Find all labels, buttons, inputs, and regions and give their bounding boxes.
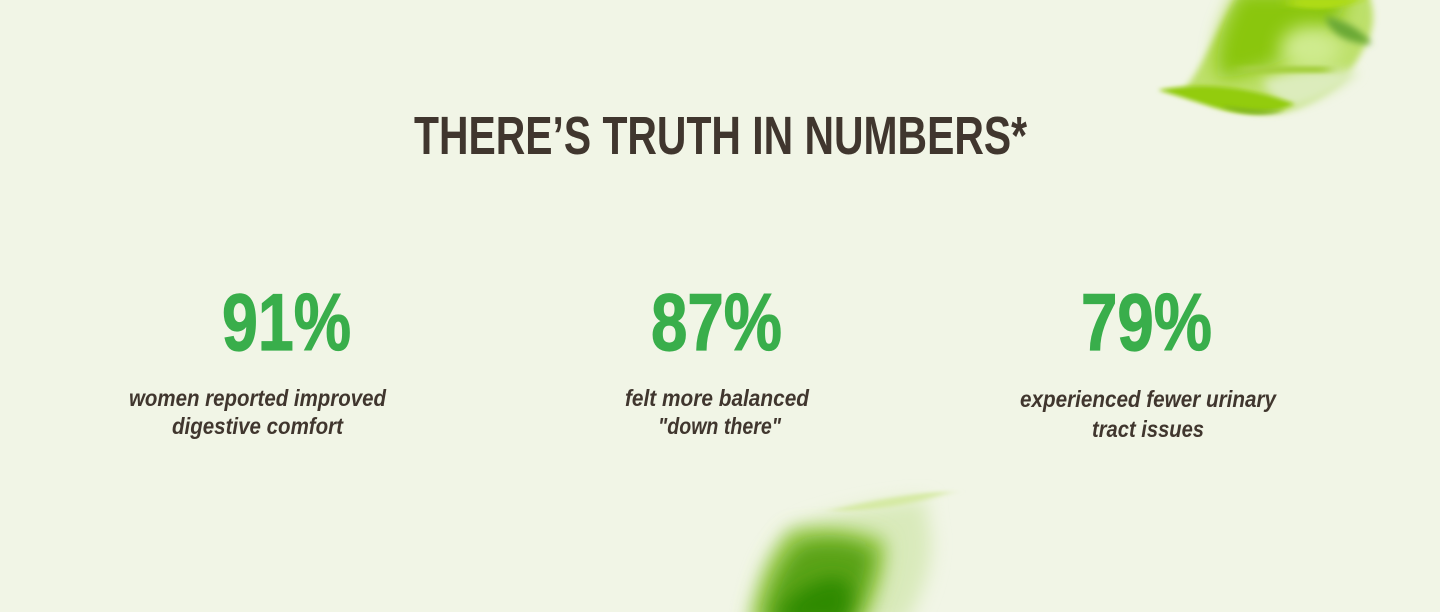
icon: blurred leaf bottom centre — [748, 491, 952, 612]
stat: 87% balance — [625, 278, 810, 439]
number: 79%: 79% — [1081, 278, 1212, 368]
icon: blurred leaf top right — [1158, 0, 1373, 114]
title: THERE’S TRUTH IN NUMBERS* — [414, 106, 1027, 166]
stat: 91% women — [129, 278, 387, 439]
description: 91%: women reported improved — [129, 385, 387, 411]
description: 87%: felt more balanced — [625, 385, 810, 411]
number: 87%: 87% — [651, 278, 782, 368]
description: 91%: digestive comfort — [172, 413, 344, 439]
description: 79%: tract issues — [1092, 416, 1204, 442]
description: 87%: "down there" — [658, 413, 782, 439]
stat: 79% urinary — [1020, 278, 1277, 442]
number: 91%: 91% — [222, 278, 351, 368]
description: 79%: experienced fewer urinary — [1020, 386, 1277, 412]
